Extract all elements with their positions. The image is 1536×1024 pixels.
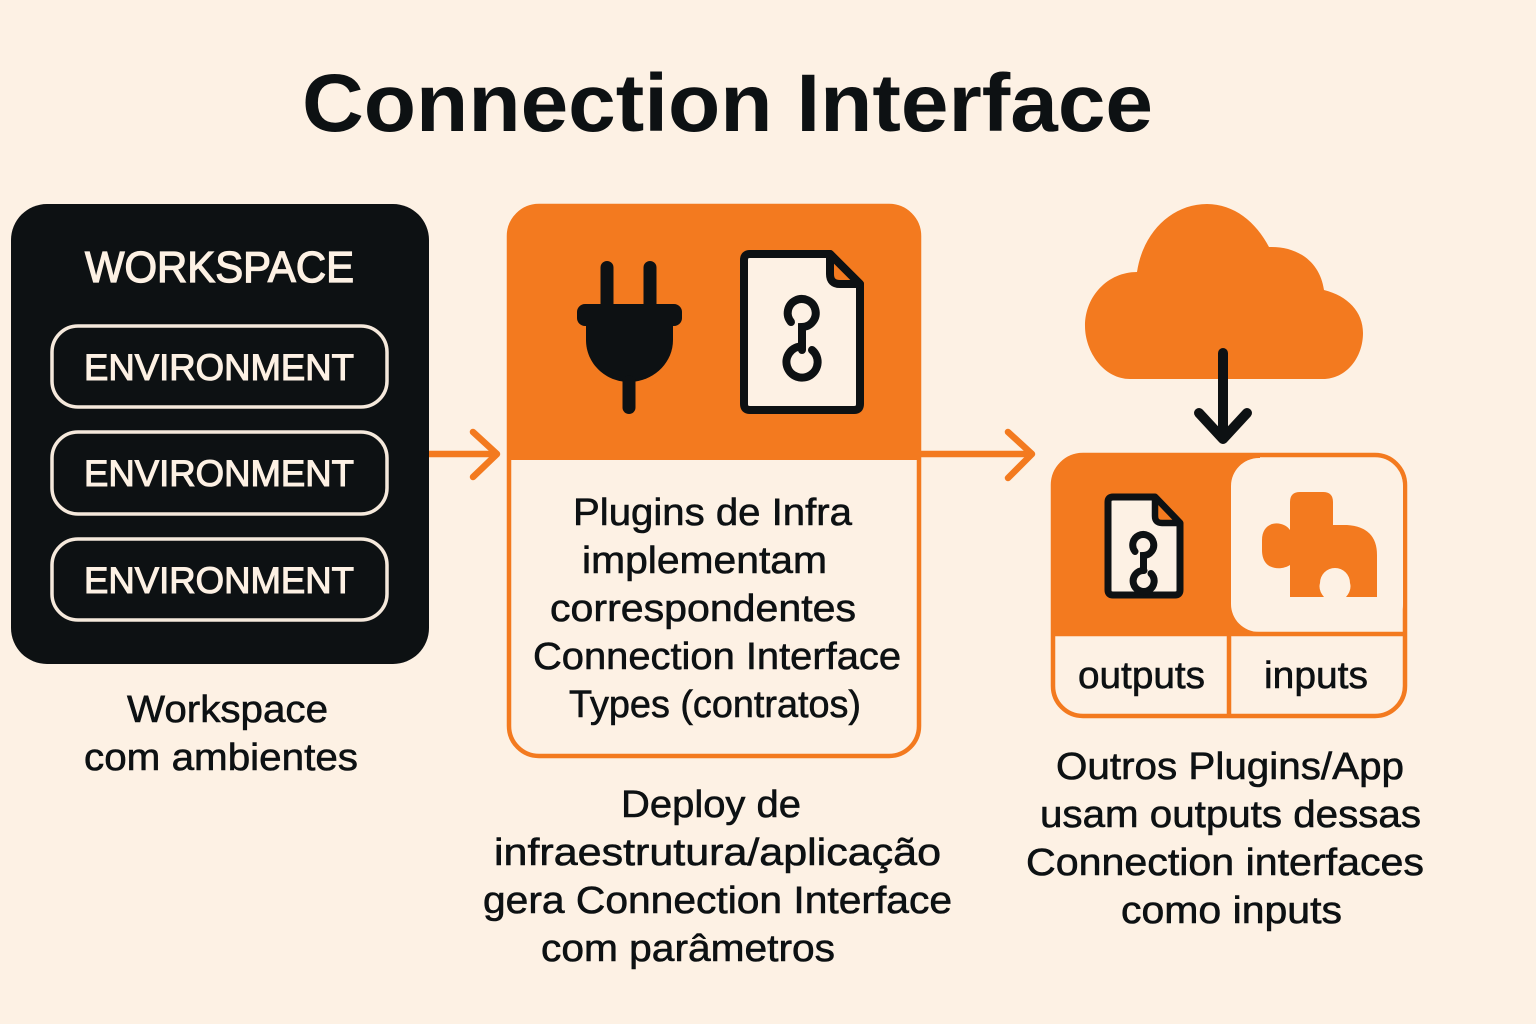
- plugins text: correspondentes: [550, 588, 856, 630]
- plugins text: Plugins de Infra: [573, 492, 853, 534]
- title: Connection Interface: [302, 58, 1153, 149]
- caption: outputs usage: Outros Plugins/App: [1056, 746, 1404, 788]
- label: inputs: inputs: [1264, 655, 1368, 697]
- plugins text: Types (contratos): [569, 684, 861, 726]
- caption: deploy: infraestrutura/aplicação: [494, 832, 941, 874]
- arrow: plugins to connection: [921, 432, 1032, 478]
- icon: connection file: [744, 254, 860, 410]
- caption: deploy: gera Connection Interface: [483, 880, 952, 922]
- icon: puzzle piece: [1262, 492, 1377, 597]
- caption: deploy: com parâmetros: [541, 928, 835, 970]
- caption: deploy: [483, 784, 952, 970]
- caption: workspace: Workspace: [127, 689, 328, 731]
- environment pill 2: [52, 432, 387, 514]
- environment pill 3: [52, 539, 387, 620]
- plugins text: Connection Interface: [533, 636, 901, 678]
- environment pill 1: ENVIRONMENT: [84, 347, 354, 388]
- panel: workspace: [11, 204, 429, 664]
- environment pill 1: [52, 326, 387, 407]
- icon: small connection file: [1108, 497, 1180, 595]
- icon: plug: [577, 261, 682, 414]
- label: outputs: outputs: [1078, 655, 1205, 697]
- caption: outputs usage: Connection interfaces: [1026, 842, 1424, 884]
- panel: connection box: [1051, 453, 1407, 716]
- plugins text: [533, 492, 901, 726]
- caption: deploy: Deploy de: [621, 784, 801, 826]
- caption: workspace: [84, 689, 358, 779]
- arrow: cloud to connection: [1199, 353, 1247, 439]
- environment pill 3: ENVIRONMENT: [84, 560, 354, 601]
- caption: outputs usage: [1026, 746, 1424, 932]
- workspace heading: WORKSPACE: [85, 243, 354, 292]
- environment pill 2: ENVIRONMENT: [84, 453, 354, 494]
- caption: outputs usage: como inputs: [1121, 890, 1342, 932]
- caption: workspace: com ambientes: [84, 737, 358, 779]
- icon: cloud: [1085, 204, 1363, 379]
- panel: plugins: [507, 204, 921, 756]
- caption: outputs usage: usam outputs dessas: [1040, 794, 1421, 836]
- plugins text: implementam: [582, 540, 827, 582]
- arrow: workspace to plugins: [429, 432, 497, 477]
